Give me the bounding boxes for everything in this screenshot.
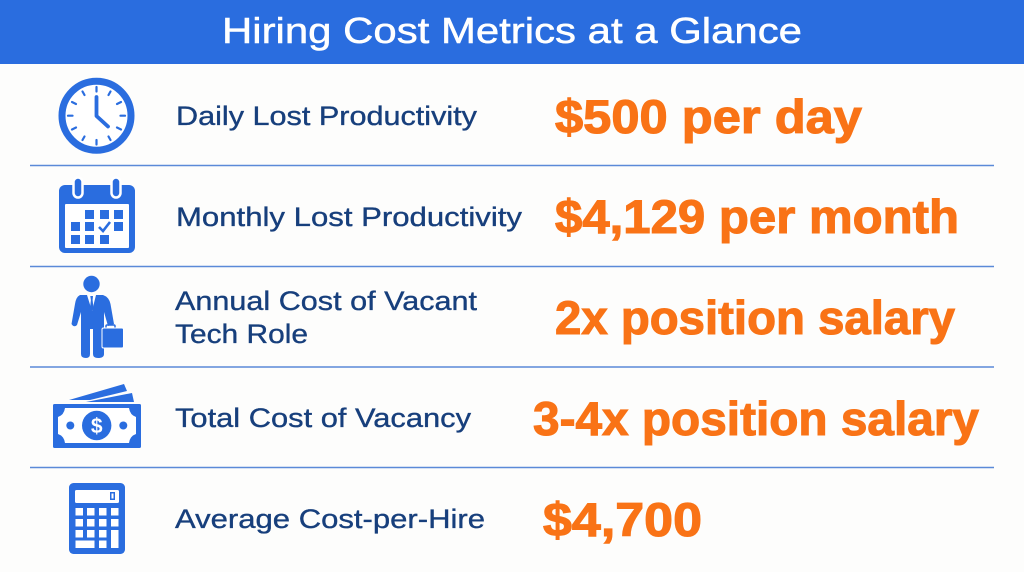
row: total cost of vacancy [53, 384, 979, 448]
label: Tech Role [175, 319, 308, 349]
title: Hiring Cost Metrics at a Glance [222, 10, 802, 51]
label: Total Cost of Vacancy [175, 403, 472, 433]
row: average cost-per-hire [69, 483, 702, 554]
label: Daily Lost Productivity [176, 101, 478, 131]
icon: calculator [69, 483, 125, 554]
value: $4,129 per month [555, 190, 959, 243]
label: Average Cost-per-Hire [175, 504, 485, 534]
value: $500 per day [555, 90, 862, 143]
row: annual cost of vacant tech role [72, 276, 955, 358]
header banner [0, 0, 1024, 64]
icon: calendar [59, 178, 135, 253]
row: daily lost productivity [62, 81, 862, 150]
label: Annual Cost of Vacant [175, 286, 478, 316]
icon: cash [53, 384, 141, 448]
label [175, 286, 478, 349]
icon: businessman with briefcase [72, 276, 124, 358]
icon: clock [62, 81, 131, 150]
icon: cash: $ [91, 415, 103, 438]
row: monthly lost productivity [59, 178, 959, 253]
label: Monthly Lost Productivity [176, 202, 523, 232]
value: 2x position salary [555, 291, 955, 344]
value: 3-4x position salary [533, 392, 979, 445]
value: $4,700 [543, 493, 702, 546]
